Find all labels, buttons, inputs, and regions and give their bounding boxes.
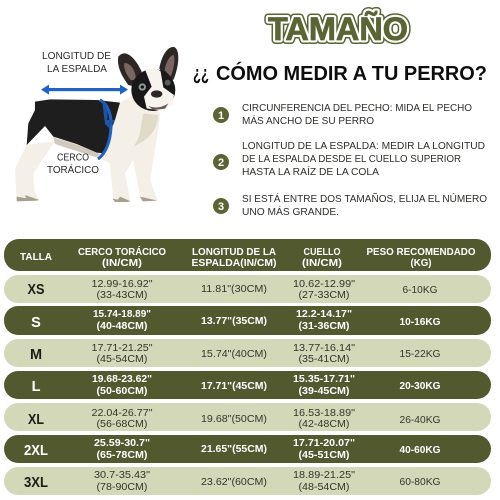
illustration: French bulldog with measurements bbox=[15, 47, 178, 202]
text: step 2 bbox=[242, 141, 485, 178]
title: TAMAÑO: TAMAÑO bbox=[268, 11, 408, 47]
row XL: (42-48CM) bbox=[298, 419, 350, 430]
row XL: 16.53-18.89" bbox=[293, 408, 355, 419]
row M: M bbox=[30, 347, 42, 363]
title: TAMAÑO: TAMAÑO bbox=[268, 11, 408, 47]
row 2XL: 21.65"(55CM) bbox=[201, 444, 267, 455]
row S: 12.2-14.17" bbox=[296, 309, 352, 320]
table header: CUELLO bbox=[304, 247, 341, 258]
arrow: chest girth bbox=[98, 100, 115, 159]
label: chest girth: TORÁCICO bbox=[47, 163, 99, 176]
row XL: XL bbox=[28, 412, 44, 428]
row 3XL: (48-54CM) bbox=[298, 482, 350, 493]
row XS: 11.81"(30CM) bbox=[201, 284, 267, 295]
text: step 3: SI ESTÁ ENTRE DOS TAMAÑOS, ELIJA EL NÚMERO bbox=[242, 192, 487, 205]
table header: (IN/CM) bbox=[102, 258, 142, 269]
label: back length: LONGITUD DE bbox=[42, 51, 111, 62]
text: step 3: UNO MÁS GRANDE. bbox=[242, 205, 339, 218]
title: TAMAÑO: TAMAÑO bbox=[268, 11, 408, 47]
icon: number 1 bbox=[213, 107, 229, 123]
row L: 20-30KG bbox=[400, 381, 441, 392]
step 3 bbox=[213, 192, 487, 218]
row XL: 22.04-26.77" bbox=[92, 408, 153, 419]
row L: 15.35-17.71" bbox=[293, 374, 355, 385]
text: step 2: DE LA ESPALDA DESDE EL CUELLO SUPERIOR bbox=[242, 154, 461, 165]
row M: 15-22KG bbox=[400, 349, 441, 360]
table header: TALLA bbox=[20, 252, 52, 263]
row XL bbox=[4, 403, 491, 431]
arrow: back length bbox=[41, 85, 128, 95]
row 2XL: 17.71-20.07" bbox=[293, 438, 355, 449]
row L: 17.71"(45CM) bbox=[201, 381, 267, 392]
row 3XL bbox=[4, 467, 491, 495]
label: back length: LA ESPALDA bbox=[47, 64, 107, 75]
step 2 bbox=[213, 141, 485, 178]
row M bbox=[4, 339, 491, 367]
icon: number 2 bbox=[213, 154, 229, 170]
heading: how to measure: ¿¿ bbox=[193, 63, 209, 85]
row M: 13.77-16.14" bbox=[293, 343, 355, 354]
row XS bbox=[4, 275, 491, 303]
heading: how to measure: CÓMO MEDIR A TU PERRO? bbox=[216, 61, 487, 85]
row M: (35-41CM) bbox=[298, 354, 350, 365]
row XS: XS bbox=[28, 282, 45, 298]
row 2XL: 40-60KG bbox=[400, 445, 441, 456]
row S: (31-36CM) bbox=[298, 321, 350, 332]
text: step 3 bbox=[242, 192, 487, 218]
table header: ESPALDA(IN/CM) bbox=[192, 258, 276, 269]
row M: 17.71-21.25" bbox=[92, 343, 153, 354]
dog head bbox=[118, 47, 178, 111]
icon: number 1: 1 bbox=[218, 110, 224, 122]
row 3XL: 60-80KG bbox=[400, 477, 441, 488]
text: step 2: LONGITUD DE LA ESPALDA: MEDIR LA LONGITUD bbox=[242, 141, 485, 152]
dog body bbox=[15, 95, 161, 202]
row 2XL: 25.59-30.7" bbox=[94, 438, 150, 449]
row XS: (33-43CM) bbox=[96, 290, 148, 301]
row 2XL bbox=[4, 435, 491, 463]
icon: number 3: 3 bbox=[218, 201, 224, 213]
row XL: 26-40KG bbox=[400, 415, 441, 426]
text: step 2: HASTA LA RAÍZ DE LA COLA bbox=[242, 165, 379, 178]
table header: (KG) bbox=[410, 258, 432, 269]
row XS: 6-10KG bbox=[402, 285, 438, 296]
text: step 1 bbox=[242, 103, 472, 127]
row XS: 12.99-16.92" bbox=[92, 279, 153, 290]
row S: 10-16KG bbox=[400, 317, 441, 328]
table header bbox=[4, 239, 491, 271]
row L: L bbox=[32, 379, 41, 395]
row L bbox=[4, 371, 491, 399]
table header: LONGITUD DE LA bbox=[192, 247, 276, 258]
table header: CERCO TORÁCICO bbox=[78, 245, 166, 258]
row 2XL: (65-78CM) bbox=[96, 450, 148, 461]
row M: 15.74"(40CM) bbox=[201, 349, 267, 360]
row M: (45-54CM) bbox=[96, 354, 148, 365]
size table bbox=[4, 239, 491, 495]
row L: (50-60CM) bbox=[96, 386, 148, 397]
row 3XL: (78-90CM) bbox=[96, 482, 148, 493]
label: chest girth: CERCO bbox=[57, 152, 89, 164]
row S: S bbox=[31, 315, 41, 331]
label: chest girth bbox=[47, 152, 99, 176]
row XL: 19.68"(50CM) bbox=[201, 414, 267, 425]
table header: PESO RECOMENDADO bbox=[366, 247, 476, 258]
icon: number 3 bbox=[213, 198, 229, 214]
icon: number 2: 2 bbox=[218, 157, 224, 169]
row 3XL: 3XL bbox=[24, 475, 48, 491]
label: back length bbox=[42, 51, 111, 75]
row L: 19.68-23.62" bbox=[92, 374, 152, 385]
row S bbox=[4, 306, 491, 335]
row 2XL: (45-51CM) bbox=[298, 450, 350, 461]
row 3XL: 18.89-21.25" bbox=[293, 470, 355, 481]
text: step 1: MÁS ANCHO DE SU PERRO bbox=[242, 114, 374, 127]
row S: 13.77"(35CM) bbox=[201, 316, 267, 327]
row 3XL: 23.62"(60CM) bbox=[201, 477, 267, 488]
table header: (IN/CM) bbox=[302, 258, 342, 269]
row XS: 10.62-12.99" bbox=[293, 279, 355, 290]
row S: (40-48CM) bbox=[96, 321, 148, 332]
row XS: (27-33CM) bbox=[298, 290, 350, 301]
row L: (39-45CM) bbox=[298, 386, 350, 397]
row S: 15.74-18.89" bbox=[93, 309, 151, 320]
row 2XL: 2XL bbox=[24, 443, 48, 459]
row XL: (56-68CM) bbox=[96, 419, 148, 430]
step 1 bbox=[213, 103, 472, 127]
text: step 1: CIRCUNFERENCIA DEL PECHO: MIDA EL PECHO bbox=[242, 103, 472, 114]
row 3XL: 30.7-35.43" bbox=[94, 470, 150, 481]
